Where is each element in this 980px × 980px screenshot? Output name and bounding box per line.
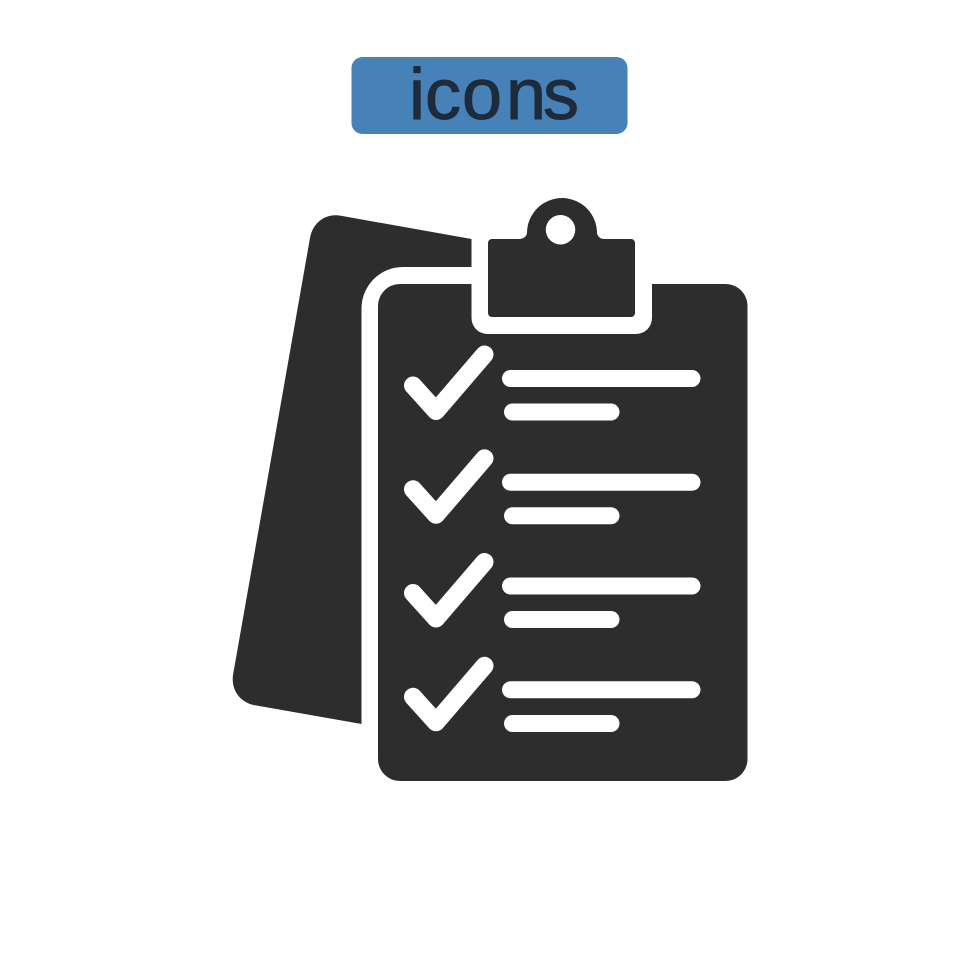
clip with hanging hole <box>488 198 635 317</box>
checklist row 2 <box>413 458 700 524</box>
checklist row 4 <box>413 666 700 732</box>
icon: clipboard checklist <box>233 198 748 781</box>
clipboard board <box>378 284 748 781</box>
checklist row 3 <box>413 562 700 628</box>
badge: icons label <box>352 55 628 135</box>
badge: icons label: icons <box>409 55 579 135</box>
checklist row 1 <box>413 354 700 420</box>
back sheet <box>233 215 472 724</box>
